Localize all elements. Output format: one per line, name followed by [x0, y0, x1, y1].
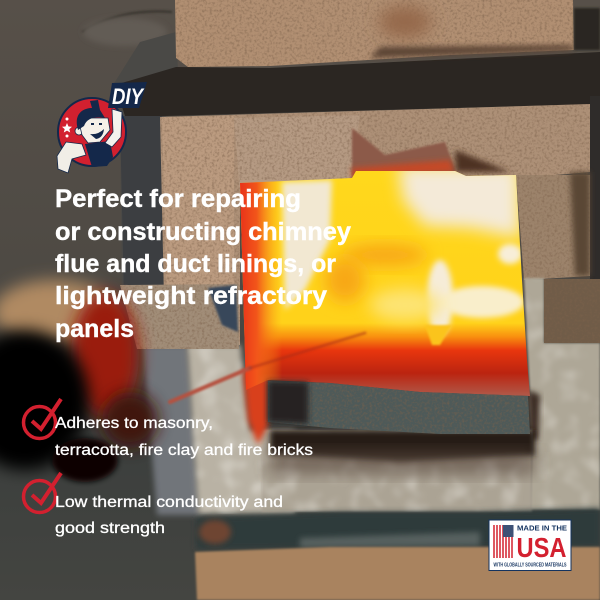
right pale wall: [524, 278, 600, 510]
fire left edge below the opening: [243, 370, 268, 445]
lower brick: [195, 547, 600, 600]
badge: Made in the USA: WITH GLOBALLY SOURCED MATERIALS: [494, 562, 567, 568]
heading: panels: [55, 315, 134, 343]
badge: Made in the USA: MADE IN THE: [517, 526, 567, 532]
small dark brick, left: [120, 284, 239, 349]
bullet text 1: Adheres to masonry,: [55, 415, 213, 432]
bullet text 1: terracotta, fire clay and fire bricks: [55, 442, 313, 459]
brick: upper block: [175, 0, 574, 67]
mascot arm, raised: [105, 109, 122, 147]
mascot smile: [90, 129, 104, 139]
lower steel bar: [196, 508, 600, 549]
bullet text 2: [55, 494, 283, 537]
lower masonry: [143, 345, 535, 515]
DIY tag: DIY: [112, 84, 145, 109]
mascot overalls: [85, 141, 113, 167]
mascot eyes: [91, 123, 102, 125]
stars: [62, 118, 72, 138]
badge: Made in the USA: [489, 520, 571, 570]
mascot head: [78, 118, 110, 143]
brick wall around the mouth: [160, 104, 590, 345]
check icon 2: [24, 473, 61, 512]
mascot ear: [75, 127, 83, 135]
blurred glove: [0, 280, 158, 482]
fire in the opening: [235, 165, 535, 403]
dark brick inside the mouth: [268, 381, 530, 434]
flag: [494, 525, 514, 558]
heading: [55, 185, 351, 343]
mascot arm, left: [57, 142, 86, 173]
bullet text 1: [55, 415, 313, 459]
heading: flue and duct linings, or: [55, 250, 336, 278]
bullet text 2: Low thermal conductivity and: [55, 494, 283, 511]
heading: Perfect for repairing: [55, 185, 301, 213]
bullet text 2: good strength: [55, 520, 165, 537]
small dark brick, right: [544, 279, 600, 343]
logo: DIY mascot: [57, 82, 147, 173]
badge: Made in the USA: USA: [516, 532, 566, 563]
check icon 1: [24, 399, 61, 438]
mascot hair: [77, 100, 105, 130]
poker rod: [170, 333, 365, 402]
heading: or constructing chimney: [55, 218, 351, 246]
steel frame: [113, 32, 600, 300]
heading: lightweight refractory: [55, 282, 327, 310]
